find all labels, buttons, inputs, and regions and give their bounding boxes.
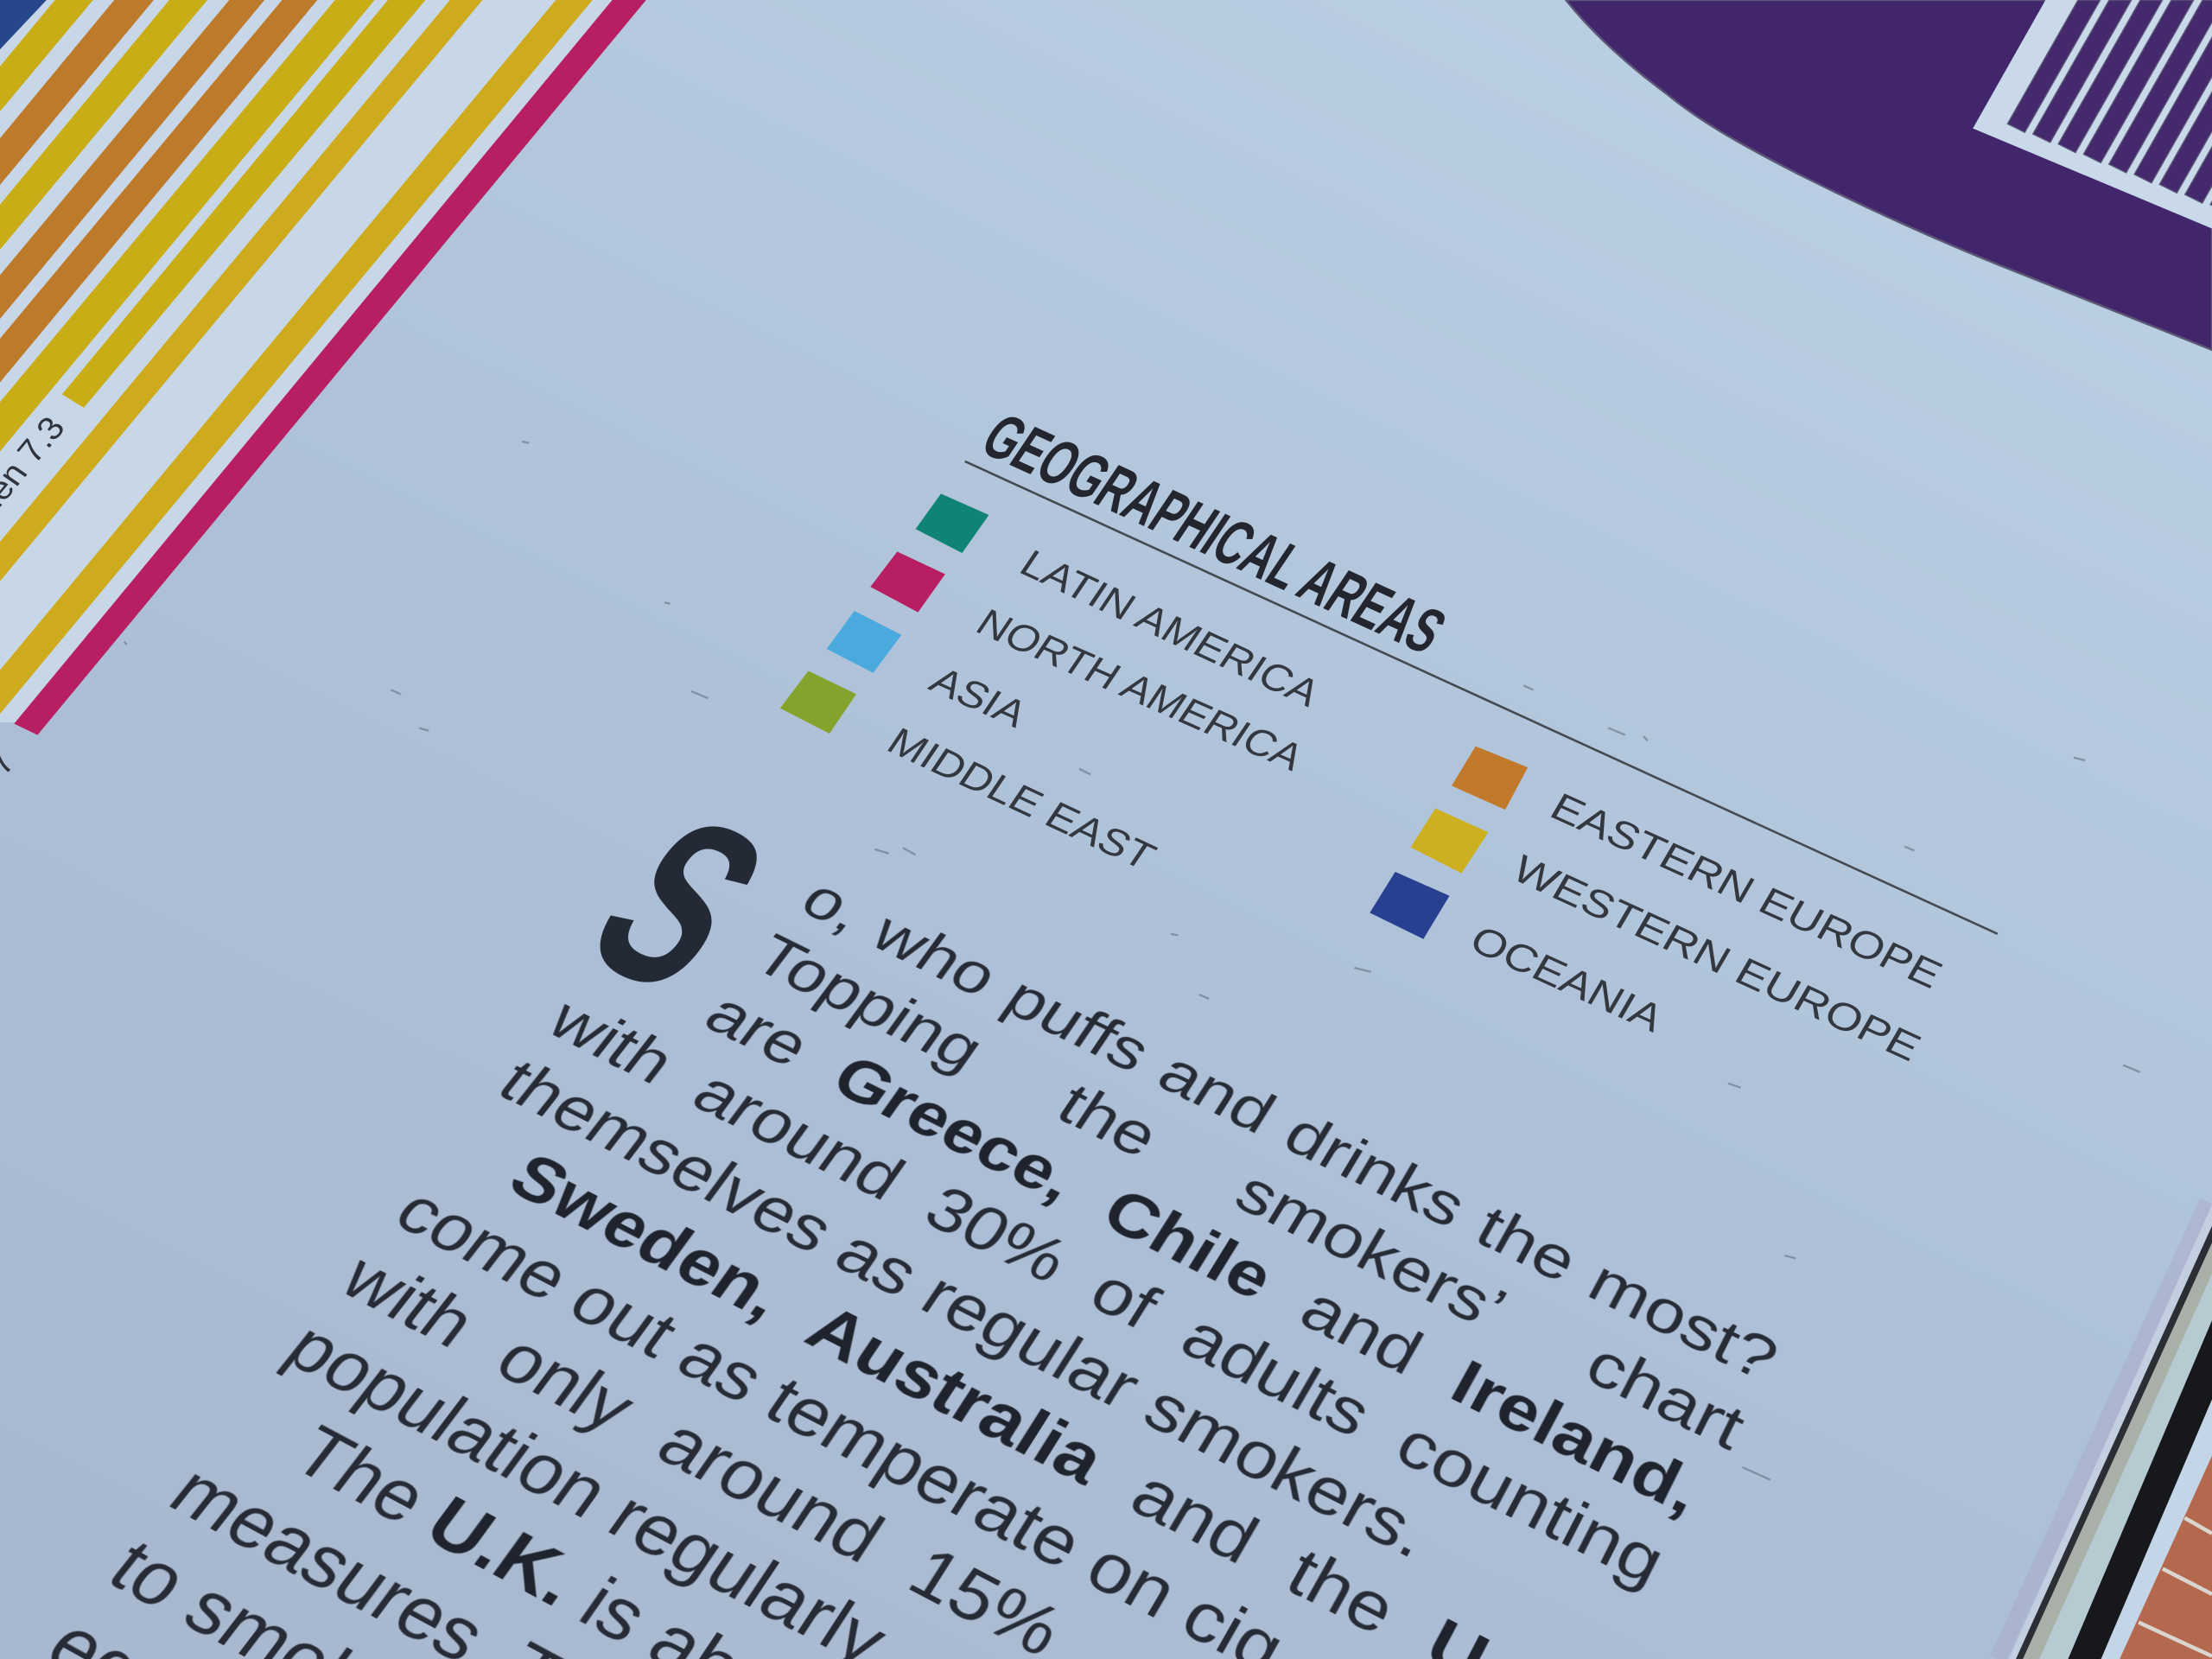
label: Eastern Europe: EASTERN EUROPE: [1543, 785, 1949, 996]
text line 2: Topping the smokers’ chart: [741, 922, 1756, 1463]
legend heading: GEOGRAPHICAL AREAS: [969, 401, 1458, 667]
swatch: Middle East: [780, 671, 856, 734]
legend: geographical areas: [780, 401, 1998, 1070]
label: North America: NORTH AMERICA: [969, 601, 1313, 779]
label: Middle East: MIDDLE EAST: [880, 720, 1164, 878]
swatch: North America: [870, 551, 945, 613]
drop cap S: S: [540, 772, 812, 1043]
article text block in page perspective: [30, 772, 1788, 1659]
swatch: Asia: [827, 611, 901, 673]
bar chart: country bars: [0, 0, 646, 735]
frame edge and brick wall: [1998, 1202, 2212, 1659]
text line 1: o, who puffs and drinks the most?: [789, 867, 1788, 1395]
label: Asia: ASIA: [922, 659, 1036, 735]
label: Western Europe: WESTERN EUROPE: [1505, 847, 1929, 1070]
text line 5: themselves as regular smokers.: [486, 1046, 1442, 1573]
purple shape with striped box: [1566, 0, 2212, 350]
text line 4: with around 30% of adults counting: [535, 985, 1675, 1600]
text line 3: are Greece, Chile and Ireland,: [692, 980, 1712, 1529]
label: Oceania: OCEANIA: [1463, 918, 1672, 1040]
swatch: Latin America: [916, 493, 988, 553]
swatch: Western Europe: [1411, 809, 1488, 874]
swatch: Eastern Europe: [1452, 747, 1528, 810]
label: Latin America: LATIN AMERICA: [1013, 542, 1329, 715]
swatch: Oceania: [1370, 872, 1450, 939]
